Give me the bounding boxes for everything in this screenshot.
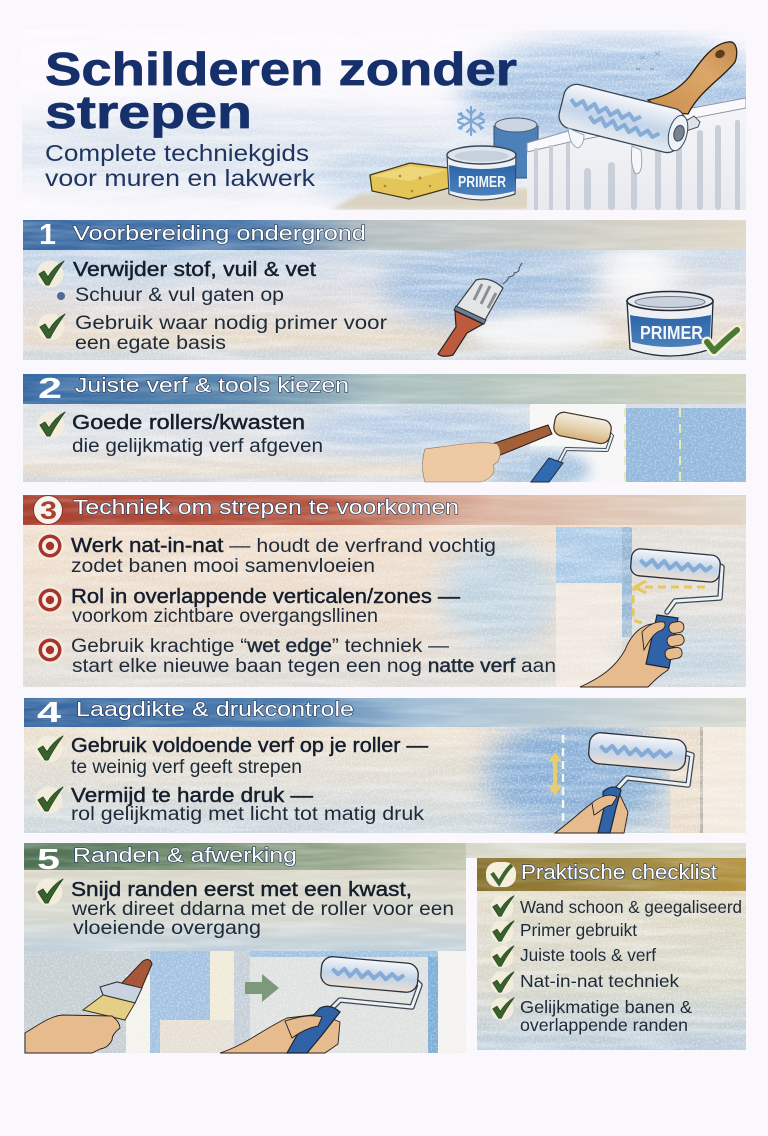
item: nat-in-nat <box>491 971 679 994</box>
text: randen eerst <box>71 879 454 939</box>
item: primer gebruikt: Primer gebruikt <box>520 920 637 940</box>
title: Schilderen zonder <box>45 43 517 95</box>
icon: check <box>36 878 63 906</box>
section 5 heading <box>24 843 466 876</box>
icon: small snowflakes <box>636 52 660 70</box>
section 2 heading: Juiste verf & tools kiezen <box>75 374 349 397</box>
panel: praktische checklist <box>466 843 746 1050</box>
section 2 background <box>23 404 746 490</box>
text: randen eerst: Snijd randen eerst met een kwast, <box>71 879 412 901</box>
text: harde druk <box>71 785 425 825</box>
illustration: brush <box>438 263 522 356</box>
panel: section 3 techniek <box>23 495 760 694</box>
text: wet edge: Gebruik krachtige “ wet edge ” techniek — <box>71 636 449 657</box>
icon: check <box>36 260 64 288</box>
section 3 heading <box>23 495 746 525</box>
section 2 heading: 2 <box>38 373 62 405</box>
illustration: radiator <box>527 98 746 210</box>
illustration: primer can <box>627 292 713 356</box>
text: wet edge: start elke nieuwe baan tegen een nog natte verf aan <box>72 656 556 677</box>
panel: section 1 voorbereiding <box>0 219 746 360</box>
panel: section 5 randen <box>24 843 466 1053</box>
subtitle: Complete techniekgids <box>45 140 309 166</box>
item: nat-in-nat: Nat-in-nat techniek <box>520 971 679 991</box>
text: randen eerst: werk direet ddarna met de roller voor een <box>71 899 454 920</box>
icon: target <box>36 636 64 664</box>
illustration: roller with hand <box>555 732 692 833</box>
arrow: yellow dashed path <box>633 581 705 623</box>
text: harde druk: rol gelijkmatig met licht tot matig druk <box>71 804 425 825</box>
panel: header banner <box>0 30 768 210</box>
title <box>45 43 517 138</box>
illustration: roller with hand <box>220 956 420 1053</box>
text: overlappende: Rol in overlappende verticalen/zones — <box>71 586 460 608</box>
subtitle <box>45 140 316 191</box>
icon: target <box>36 532 64 560</box>
icon: check on can <box>707 330 737 351</box>
text: voldoende verf: te weinig verf geeft strepen <box>71 757 302 778</box>
text: wet edge <box>71 636 556 677</box>
panel: section 4 laagdikte <box>24 697 746 835</box>
section 4 heading <box>24 697 746 729</box>
item: primer gebruikt <box>491 920 637 943</box>
text: randen eerst: vloeiende overgang <box>73 918 261 939</box>
illustration: primer tin: PRIMER <box>458 174 506 191</box>
subtitle: voor muren en lakwerk <box>45 165 316 191</box>
section 3 background <box>23 525 760 694</box>
text: primer advies: een egate basis <box>75 333 226 354</box>
checklist heading <box>477 858 746 891</box>
section 1 heading: 1 <box>39 219 56 251</box>
text: gelijkmatig: die gelijkmatig verf afgeven <box>72 436 323 457</box>
icon: target <box>36 586 64 614</box>
text: verwijder stof: Verwijder stof, vuil & vet <box>73 259 316 281</box>
item: gelijkmatige banen: overlappende randen <box>520 1015 688 1035</box>
section 4 background <box>24 727 746 833</box>
illustration: sponge <box>370 163 449 199</box>
text: schuur: Schuur & vul gaten op <box>75 285 284 306</box>
checklist background <box>477 891 746 1050</box>
arrow: double yellow and white dashes <box>548 735 563 822</box>
illustration: paint tin behind <box>494 118 538 178</box>
text: voldoende verf: Gebruik voldoende verf op je roller — <box>71 735 428 757</box>
section 4 heading: 4 <box>37 697 61 729</box>
section 3 heading: Techniek om strepen te voorkomen <box>73 496 459 519</box>
item: gelijkmatige banen: Gelijkmatige banen & <box>520 997 692 1017</box>
illustration: roller with hand <box>580 548 722 687</box>
icon: check <box>38 412 65 438</box>
section 1 heading <box>23 219 746 251</box>
item: juiste tools: Juiste tools & verf <box>520 945 656 965</box>
text: voldoende verf <box>71 735 428 778</box>
section 3 heading: 3 <box>40 497 57 525</box>
illustration: primer tin <box>447 146 516 200</box>
section 2 heading <box>23 373 746 405</box>
illustration: hand with brush <box>25 960 152 1053</box>
icon: check <box>36 786 63 814</box>
section 5 background <box>24 870 466 1053</box>
icon: check <box>36 736 63 762</box>
checklist heading: Praktische checklist <box>521 861 717 884</box>
item: juiste tools <box>491 945 656 968</box>
icon: snowflake <box>458 107 484 135</box>
text: harde druk: Vermijd te harde druk — <box>71 785 313 807</box>
text: nat-in-nat <box>71 535 496 577</box>
text: nat-in-nat: zodet banen mooi samenvloeien <box>71 556 375 577</box>
item: wand schoon: Wand schoon & geegaliseerd <box>520 897 742 917</box>
title: strepen <box>45 86 252 138</box>
panel: section 2 verf en tools <box>23 373 746 490</box>
arrow: green right arrow <box>245 974 279 1002</box>
section 5 heading: Randen & afwerking <box>73 844 297 867</box>
icon: bullet <box>57 292 65 300</box>
icon: check <box>38 314 65 340</box>
section 4 heading: Laagdikte & drukcontrole <box>76 698 354 721</box>
section 5 heading: 5 <box>37 844 60 876</box>
item: gelijkmatige banen <box>491 997 692 1035</box>
text: primer advies: Gebruik waar nodig primer voor <box>75 313 388 334</box>
section 1 heading: Voorbereiding ondergrond <box>73 222 366 245</box>
illustration: hand with small roller <box>422 411 613 482</box>
text: overlappende: voorkom zichtbare overgangsllinen <box>72 606 378 627</box>
checklist top strip <box>466 843 746 858</box>
text: goede rollers: Goede rollers/kwasten <box>72 412 305 434</box>
section 1 background <box>0 243 746 360</box>
text: nat-in-nat: Werk nat-in-nat — houdt de verfrand vochtig <box>71 535 496 557</box>
illustration: paint roller with brush handle <box>556 42 737 174</box>
text: primer advies <box>75 313 388 354</box>
text: overlappende <box>71 586 460 627</box>
illustration: primer can: PRIMER <box>640 323 703 343</box>
